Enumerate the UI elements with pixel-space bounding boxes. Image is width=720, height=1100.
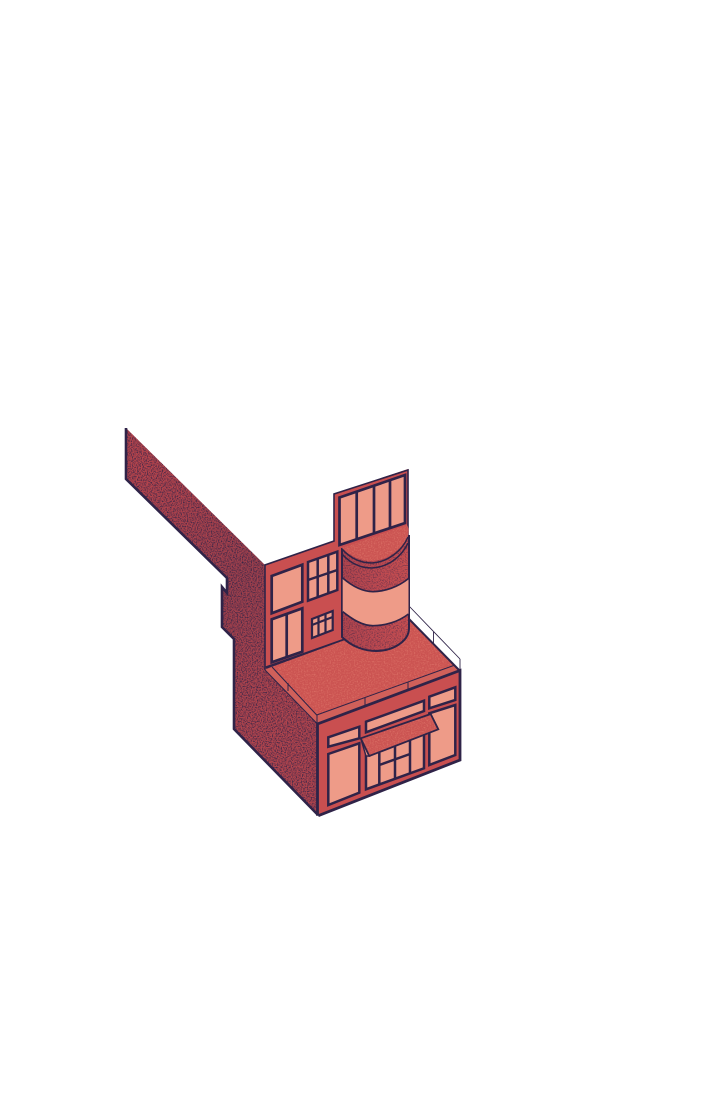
- top rim lines: [342, 537, 408, 568]
- cylindrical tower: [342, 525, 409, 651]
- facade base line: [266, 640, 345, 668]
- door: [366, 729, 424, 789]
- facade outline: [265, 470, 408, 670]
- shop window large right: [429, 705, 455, 765]
- light band: [343, 578, 408, 626]
- roof terrace: [265, 619, 460, 724]
- cylinder top: [342, 525, 409, 561]
- cylinder outline: [342, 535, 409, 651]
- roof back edge: [409, 619, 459, 670]
- front wall: [318, 670, 460, 816]
- awning side: [361, 738, 369, 756]
- cylinder body: [342, 535, 409, 651]
- railing: [409, 606, 460, 670]
- roof curb: [265, 665, 460, 724]
- left wall outline: [126, 428, 318, 815]
- window top left: [272, 565, 302, 613]
- front shop facade: [318, 670, 460, 816]
- shop window large left: [328, 743, 359, 805]
- facade wall: [265, 469, 408, 670]
- left side wall: [126, 428, 318, 815]
- window bottom left: [272, 608, 302, 662]
- awning outline: [361, 714, 438, 756]
- upper tall window: [340, 475, 405, 545]
- awning canopy: [361, 714, 438, 756]
- awning: [361, 714, 438, 756]
- roof surface: [266, 619, 460, 724]
- shop window small left: [328, 727, 359, 747]
- window top middle: [308, 552, 337, 601]
- band lines: [343, 578, 408, 626]
- upper facade with windows: [265, 469, 408, 670]
- roof lines: [265, 665, 455, 724]
- shop window small right: [429, 687, 455, 708]
- front outline: [318, 670, 460, 816]
- small grid window: [312, 611, 333, 638]
- transom window: [366, 701, 424, 732]
